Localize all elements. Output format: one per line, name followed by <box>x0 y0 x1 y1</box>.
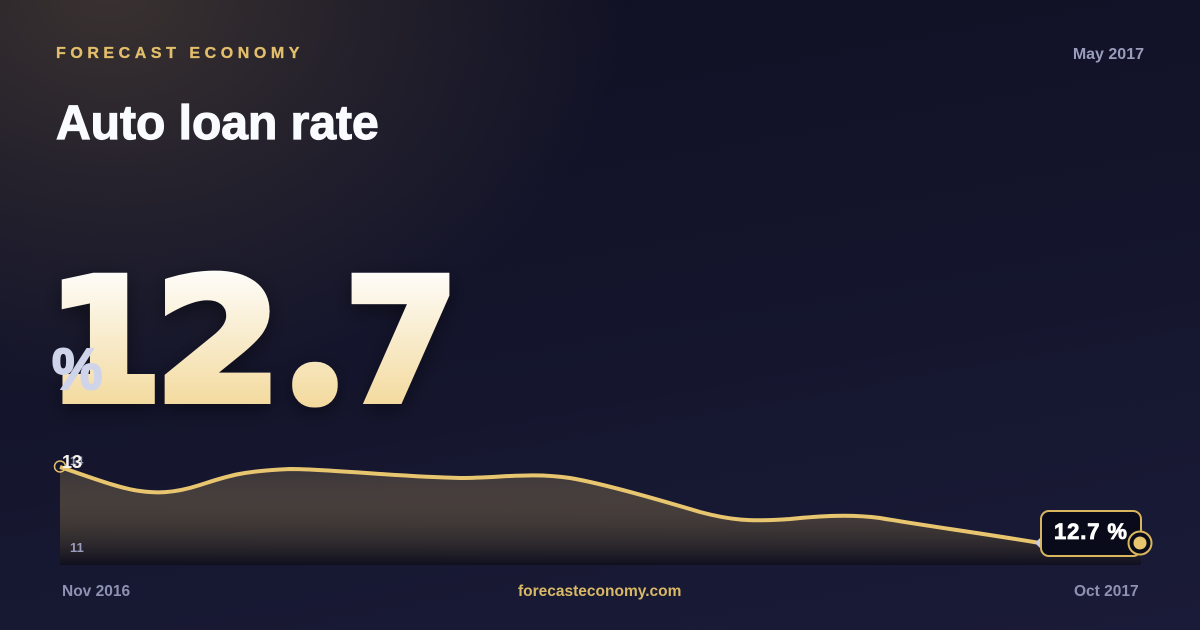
website: forecasteconomy.com <box>518 583 681 600</box>
end date: Oct 2017 <box>1074 583 1139 600</box>
big value: 7 <box>344 244 459 440</box>
start date: Nov 2016 <box>62 583 130 600</box>
date: May 2017 <box>1073 46 1144 63</box>
big value: 2 <box>154 243 282 440</box>
percent sign: % <box>52 337 103 402</box>
trend line <box>60 467 1040 543</box>
callout box <box>1041 511 1141 556</box>
callout value: 12.7 % <box>1054 519 1128 544</box>
big value <box>47 243 459 440</box>
title: Auto loan rate <box>56 97 379 150</box>
end marker <box>1128 532 1152 554</box>
area line chart <box>54 460 1152 565</box>
area fill <box>60 467 1141 565</box>
big value: 1 <box>47 244 162 440</box>
brand label: FORECAST ECONOMY <box>56 45 304 62</box>
big value: . <box>312 366 318 393</box>
axis max label: 13 <box>62 452 82 472</box>
axis max ghost label: 14 <box>70 454 83 468</box>
axis min label: 11 <box>70 540 84 555</box>
callout pointer <box>1035 537 1041 549</box>
start marker <box>54 461 66 472</box>
